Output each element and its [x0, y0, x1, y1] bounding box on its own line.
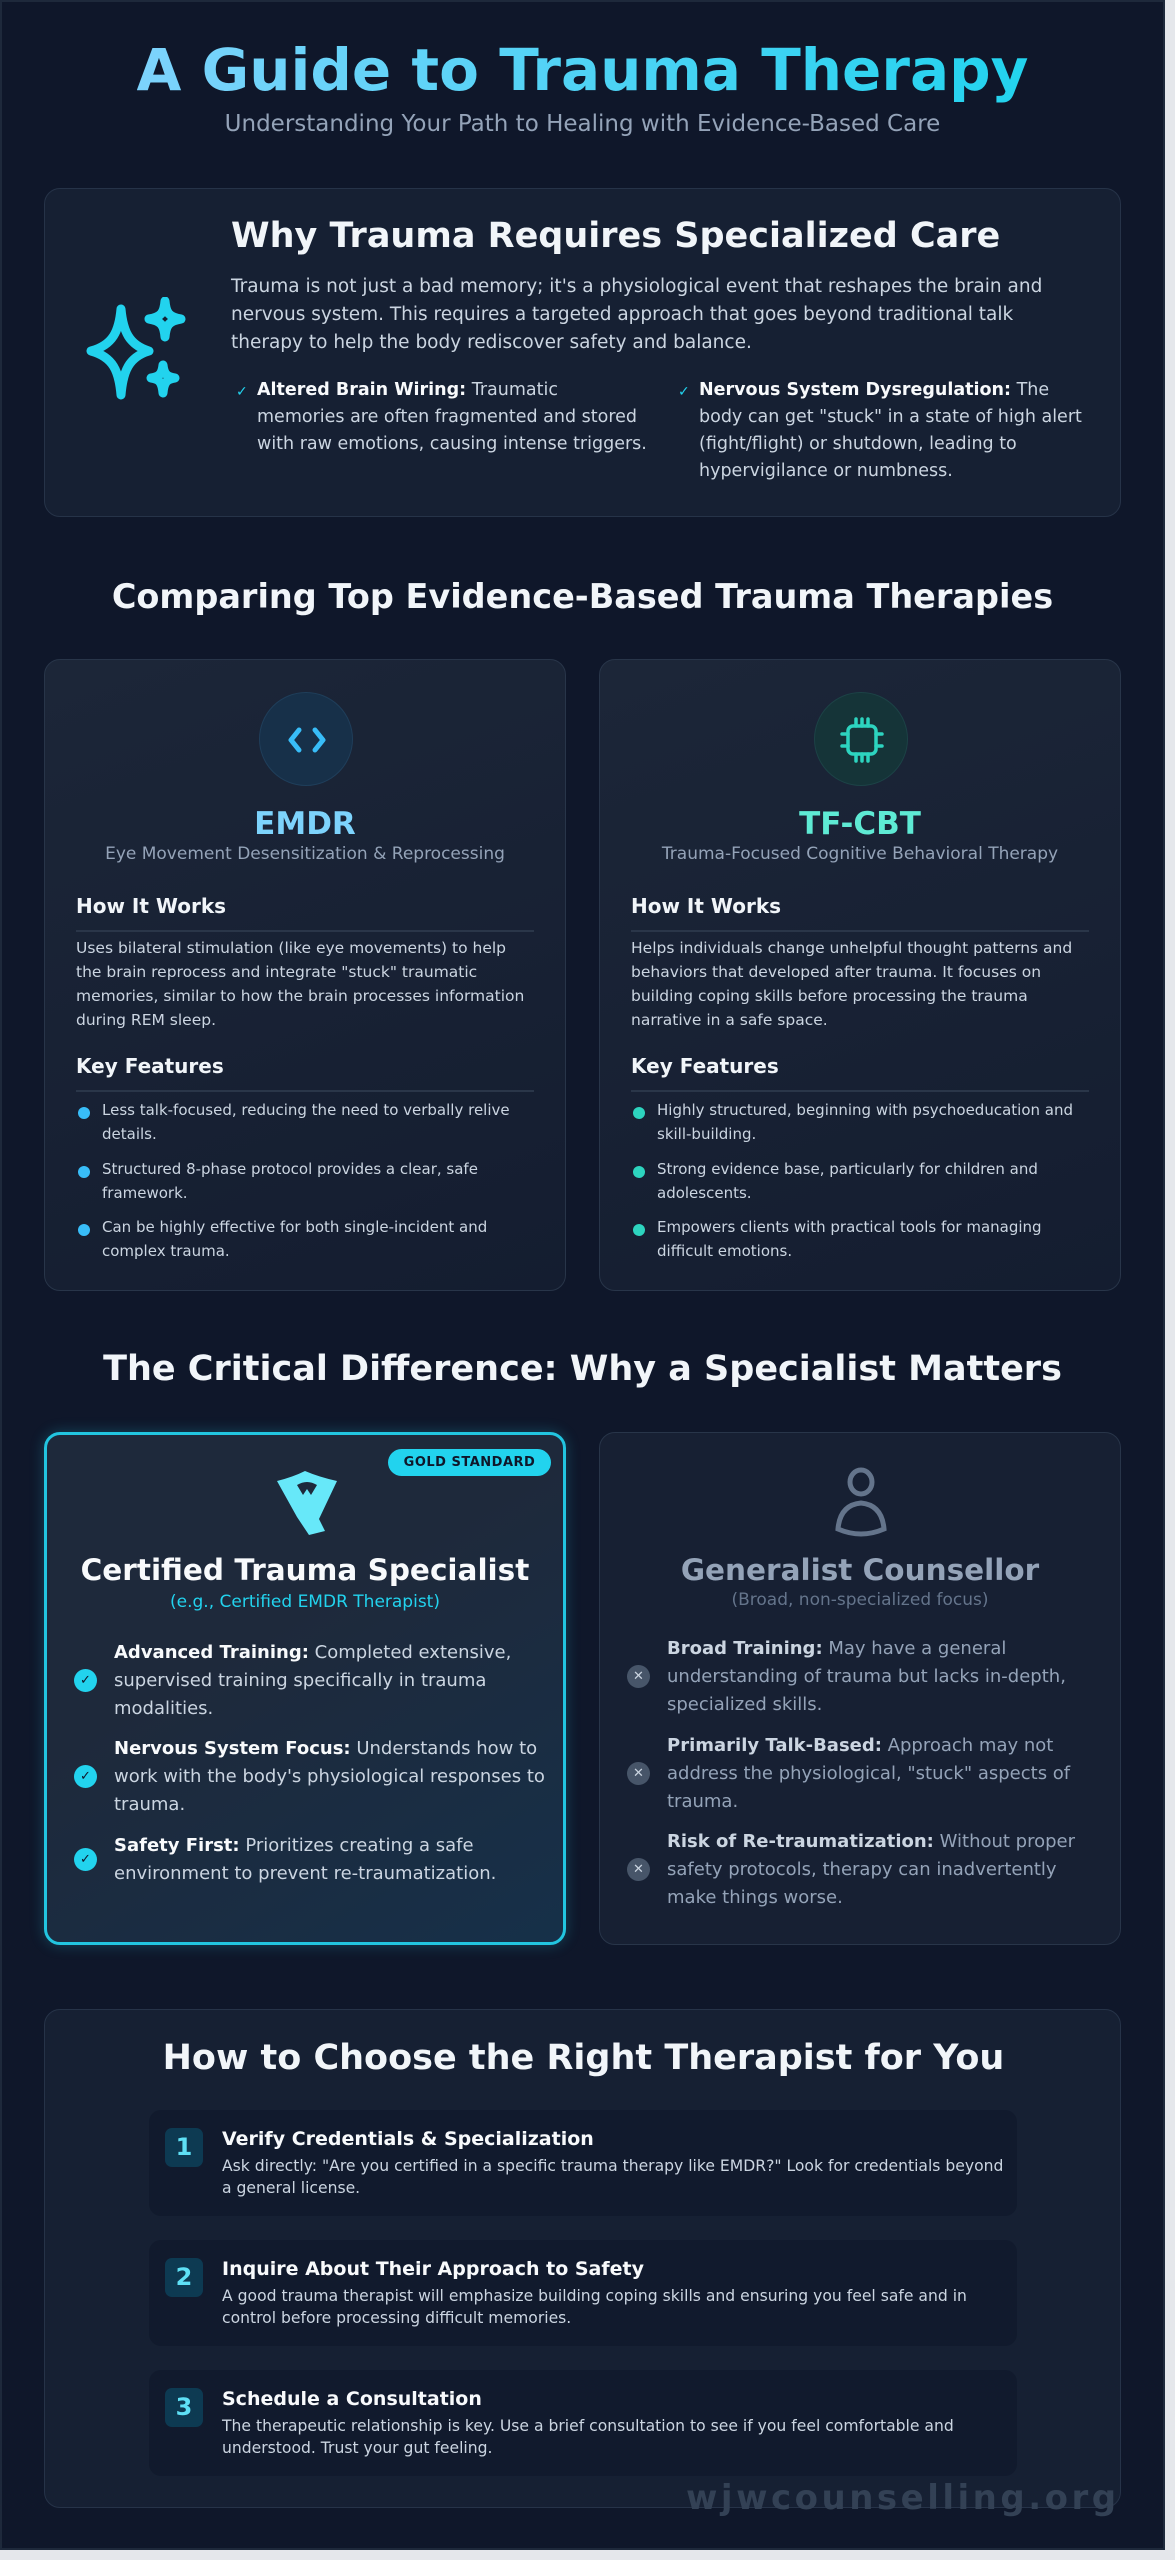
panel: certified specialist: Safety First: Prioritizes creating a safe environment to prevent re-traumatization.: [114, 1835, 496, 1884]
name: EMDR: [254, 806, 356, 842]
how it works: How It Works: [76, 894, 226, 918]
icon: tie: [277, 1471, 337, 1535]
bullet: brain wiring: [236, 380, 647, 454]
key features: [631, 1054, 1089, 1092]
subtitle: (Broad, non-specialized focus): [731, 1590, 989, 1610]
icon: sparkles: [86, 297, 186, 400]
heading: comparing therapies: Comparing Top Evidence-Based Trauma Therapies: [112, 577, 1053, 616]
step 3: 3: [176, 2393, 192, 2421]
heading: How to Choose the Right Therapist for You: [163, 2038, 1004, 2078]
title: Certified Trauma Specialist: [81, 1553, 529, 1587]
full name: Eye Movement Desensitization & Reprocessing: [105, 844, 505, 864]
step 3: Schedule a Consultation: [222, 2388, 482, 2410]
icon: chip: [814, 692, 908, 786]
panel: EMDR: Uses bilateral stimulation (like eye movements) to help the brain reprocess and integrate "stuck" traumatic memories, similar to how the brain processes information during REM sleep.: [76, 939, 524, 1029]
how it works: [76, 894, 534, 932]
key features: Key Features: [76, 1054, 224, 1078]
panel: generalist: ✕: [633, 1862, 644, 1877]
key features: Key Features: [631, 1054, 779, 1078]
panel: generalist: [599, 1432, 1121, 1945]
panel: certified specialist: [44, 1432, 566, 1945]
step 3: [149, 2370, 1017, 2476]
panel: why specialized care: [44, 188, 1121, 517]
intro paragraph: Trauma is not just a bad memory; it's a physiological event that reshapes the brain and nervous system. This requires a targeted approach that goes beyond traditional talk therapy to help the body rediscover safety and balance.: [231, 276, 1042, 353]
step 2: Inquire About Their Approach to Safety: [222, 2258, 644, 2280]
bullet: brain wiring: memories are often fragmented and stored with raw emotions, causing intense triggers.: [257, 407, 647, 454]
panel: generalist: ✕: [633, 1669, 644, 1684]
name: TF-CBT: [799, 806, 921, 842]
panel: certified specialist: Nervous System Focus: Understands how to work with the body's physiological responses to trauma.: [114, 1738, 545, 1815]
panel: EMDR: [44, 659, 566, 1291]
heading: critical difference: The Critical Difference: Why a Specialist Matters: [103, 1349, 1062, 1389]
panel: EMDR: Structured 8-phase protocol provides a clear, safe framework.: [102, 1160, 478, 1202]
title: Generalist Counsellor: [681, 1553, 1039, 1587]
badge: [388, 1449, 551, 1476]
step 1: Ask directly: "Are you certified in a specific trauma therapy like EMDR?" Look for credentials beyond a general license.: [222, 2157, 1003, 2197]
panel: TF-CBT: Highly structured, beginning with psychoeducation and skill-building.: [657, 1101, 1073, 1143]
subtitle: Understanding Your Path to Healing with Evidence-Based Care: [225, 111, 940, 137]
panel: certified specialist: ✓: [80, 1673, 91, 1688]
step 2: A good trauma therapist will emphasize building coping skills and ensuring you feel safe and in control before processing difficult memories.: [222, 2287, 967, 2327]
items: Broad Training: May have a general understanding of trauma but lacks in-depth, specialized skills.: [667, 1638, 1066, 1715]
panel: TF-CBT: [599, 659, 1121, 1291]
step 1: Verify Credentials & Specialization: [222, 2128, 594, 2150]
title: A Guide to Trauma Therapy: [137, 36, 1028, 104]
panel: TF-CBT: Empowers clients with practical tools for managing difficult emotions.: [657, 1218, 1042, 1260]
panel: TF-CBT: Helps individuals change unhelpful thought patterns and behaviors that developed after trauma. It focuses on building coping skills before processing the trauma narrative in a safe space.: [631, 939, 1072, 1029]
step 1: [149, 2110, 1017, 2216]
watermark: wjwcounselling.org: [686, 2478, 1120, 2518]
panel: EMDR: Can be highly effective for both single-incident and complex trauma.: [102, 1218, 487, 1260]
items: Advanced Training: Completed extensive, supervised training specifically in trauma modalities.: [114, 1642, 511, 1719]
step 2: [149, 2240, 1017, 2346]
subtitle: (e.g., Certified EMDR Therapist): [170, 1592, 440, 1612]
key features: [76, 1054, 534, 1092]
bullet: dysregulation: Nervous System Dysregulation: The body can get "stuck" in a state of high alert (fight/flight) or shutdown, leading to hypervigilance or numbness.: [699, 380, 1082, 481]
heading: Why Trauma Requires Specialized Care: [231, 216, 1000, 256]
step 3: The therapeutic relationship is key. Use a brief consultation to see if you feel comfortable and understood. Trust your gut feeling.: [222, 2417, 954, 2457]
panel: generalist: ✕: [633, 1766, 644, 1781]
bullet: brain wiring: ✓: [236, 384, 248, 400]
how it works: [631, 894, 1089, 932]
icon: arrows: [259, 692, 353, 786]
bullet: brain wiring: Altered Brain Wiring: Traumatic: [257, 380, 558, 400]
panel: how to choose: [44, 2009, 1121, 2508]
full name: Trauma-Focused Cognitive Behavioral Therapy: [662, 844, 1058, 864]
panel: certified specialist: ✓: [80, 1769, 91, 1784]
bullet: dysregulation: ✓: [678, 384, 690, 400]
panel: TF-CBT: Strong evidence base, particularly for children and adolescents.: [657, 1160, 1038, 1202]
step 1: 1: [176, 2133, 192, 2161]
panel: generalist: Primarily Talk-Based: Approach may not address the physiological, "stuck" aspects of trauma.: [667, 1735, 1070, 1812]
step 2: 2: [176, 2263, 192, 2291]
panel: generalist: Risk of Re-traumatization: Without proper safety protocols, therapy can inadvertently make things worse.: [667, 1831, 1075, 1908]
panel: certified specialist: ✓: [80, 1852, 91, 1867]
how it works: How It Works: [631, 894, 781, 918]
icon: person: [835, 1468, 887, 1536]
badge: GOLD STANDARD: [404, 1455, 535, 1470]
panel: EMDR: Less talk-focused, reducing the need to verbally relive details.: [102, 1101, 510, 1143]
